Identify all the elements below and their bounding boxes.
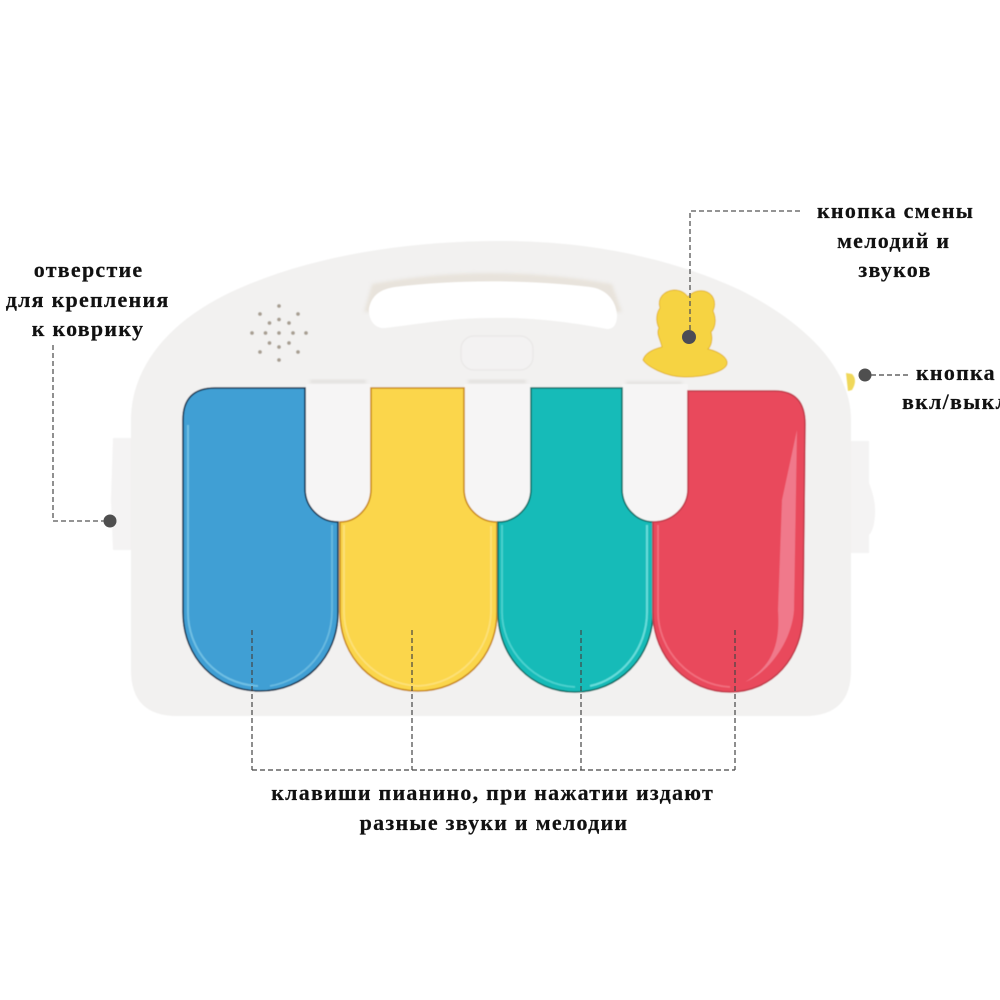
melody button — [643, 290, 727, 377]
toy body — [131, 241, 851, 716]
right side tab — [848, 441, 875, 553]
leader: piano keys — [252, 630, 735, 770]
leader: mat attachment — [53, 345, 116, 528]
red key — [653, 391, 805, 692]
label: melody button: кнопка смены — [817, 198, 974, 223]
label: power switch: кнопка — [916, 360, 996, 385]
speaker holes — [250, 304, 308, 362]
blue key — [183, 388, 338, 691]
teal key — [498, 388, 653, 692]
label: melody button: звуков — [858, 257, 932, 282]
white key 1 — [306, 384, 371, 522]
label: mat attachment: отверстие — [34, 257, 143, 282]
label: piano keys: клавиши пианино, при нажатии издают — [271, 780, 714, 805]
shadow above white keys — [310, 380, 682, 385]
centre button — [461, 336, 533, 370]
handle opening — [369, 281, 617, 329]
power switch nub — [846, 373, 855, 391]
leader: melody button — [682, 211, 802, 344]
yellow key — [340, 388, 497, 691]
handle recess — [364, 273, 622, 312]
label: mat attachment: к коврику — [32, 316, 144, 341]
white key 2 — [464, 384, 531, 522]
piano toy — [111, 241, 875, 716]
leader: power switch — [858, 368, 911, 382]
left side tab — [111, 438, 136, 550]
label: mat attachment: для крепления — [6, 287, 170, 312]
white key 3 — [622, 384, 688, 522]
label: melody button: мелодий и — [837, 228, 950, 253]
label: piano keys: разные звуки и мелодии — [360, 810, 628, 835]
